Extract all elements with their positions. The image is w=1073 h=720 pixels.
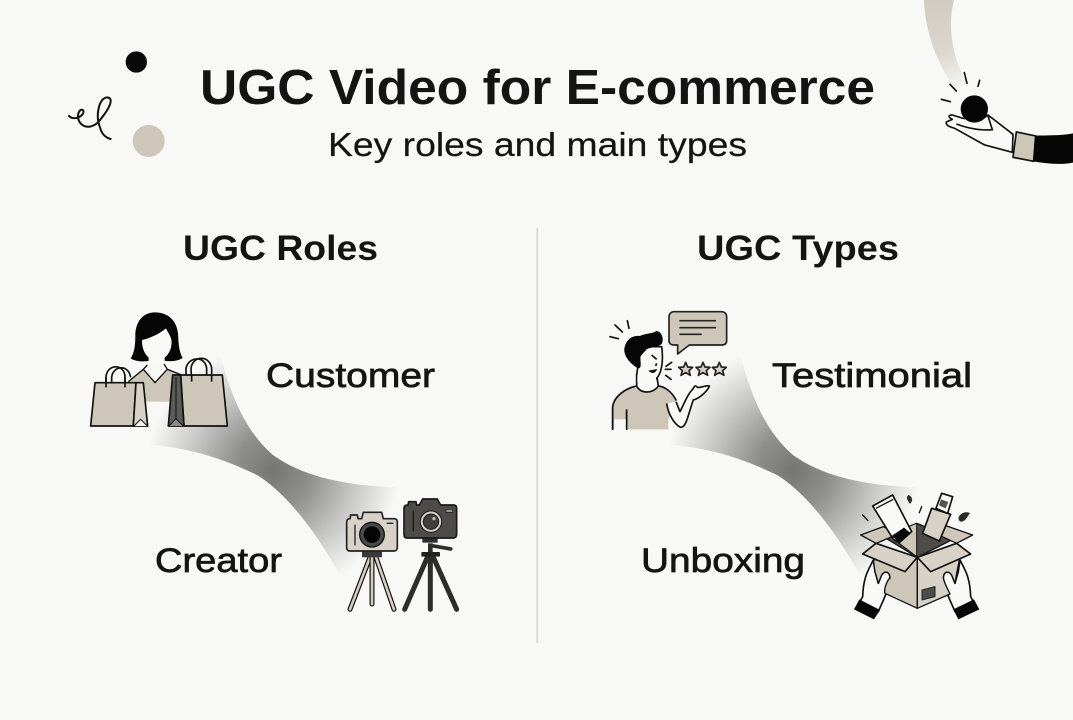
label: Creator: Creator [155, 542, 282, 580]
panel: UGC Types [610, 229, 979, 619]
back flaps [861, 527, 898, 543]
icon: unboxing hands and box [854, 493, 979, 619]
droplets and sparks [907, 495, 970, 522]
box body [873, 557, 917, 608]
swoosh connector: customer to creator [140, 345, 420, 575]
dark camera [404, 499, 457, 538]
light camera [347, 512, 397, 551]
black dot [126, 51, 147, 73]
box interior [883, 523, 955, 557]
cuffs [854, 599, 880, 619]
right hand [943, 560, 973, 612]
panel: UGC Roles [91, 229, 457, 609]
hand and ball artwork [941, 73, 1073, 164]
beige dot [133, 125, 165, 157]
light tripod [350, 557, 394, 609]
hair [131, 312, 183, 361]
speech bubble [669, 312, 727, 354]
icon: testimonial person with speech bubble and stars [610, 312, 727, 430]
stars [679, 362, 726, 375]
box label [922, 587, 935, 600]
decoration: hand holding ball [924, 0, 1073, 164]
divider [536, 228, 538, 643]
spark lines [941, 73, 980, 102]
label: Customer: Customer [266, 357, 435, 395]
squiggle [69, 97, 111, 139]
icon: customer with shopping bags [91, 312, 227, 426]
label: Testimonial: Testimonial [772, 357, 972, 395]
dark tripod [405, 557, 457, 609]
torso [613, 386, 679, 429]
subtitle: Key roles and main types [328, 126, 747, 163]
face [142, 328, 172, 361]
title: UGC Video for E-commerce [200, 61, 875, 115]
decoration: dots and squiggle [69, 51, 165, 157]
emphasis lines [610, 321, 672, 379]
ball [961, 95, 988, 123]
bottle [923, 508, 951, 541]
icon: cameras on tripods [347, 499, 457, 609]
swoosh connector: testimonial to unboxing [660, 345, 940, 575]
tube [873, 495, 912, 543]
heading: UGC Roles: UGC Roles [183, 229, 378, 268]
neck and face [637, 375, 658, 392]
right bag [186, 358, 212, 382]
cuff [1013, 132, 1036, 161]
falling arc [924, 0, 968, 89]
label: Unboxing: Unboxing [641, 542, 805, 580]
hair [624, 331, 663, 368]
body [128, 369, 183, 402]
left hand [860, 560, 890, 612]
heading: UGC Types: UGC Types [697, 229, 899, 268]
hand [946, 115, 1013, 152]
front flaps [863, 543, 917, 572]
left bag [106, 367, 131, 387]
sleeve [1033, 133, 1073, 164]
arm and hand [667, 386, 709, 427]
